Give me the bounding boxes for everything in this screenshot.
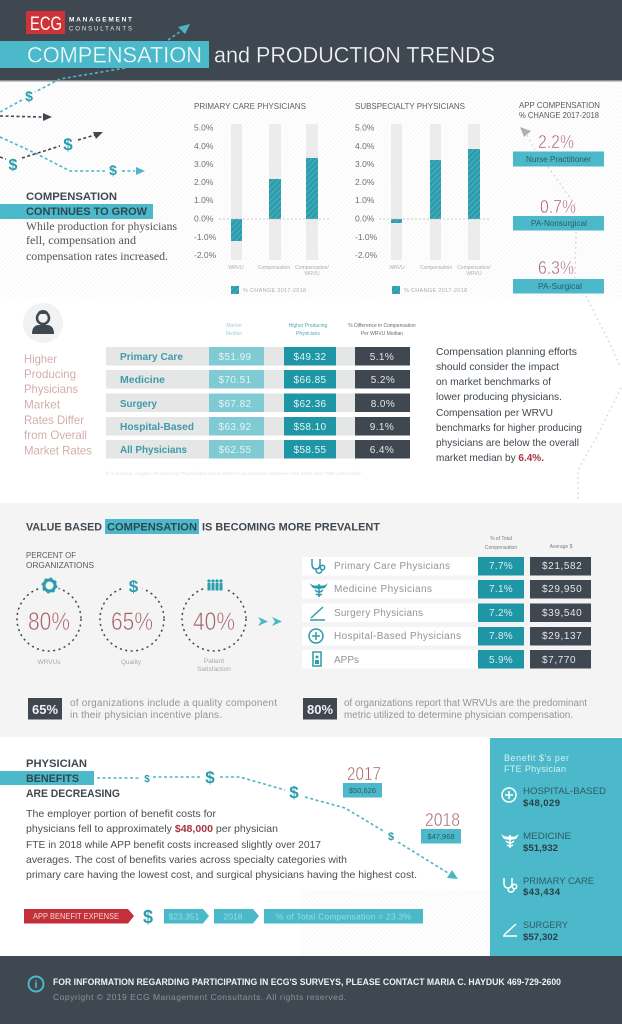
table: value based by specialty: $29,137 (542, 631, 582, 642)
heading: COMPENSATION (107, 522, 197, 534)
logo (26, 11, 132, 35)
chart: primary care physicians: -2.0% (194, 250, 217, 260)
rows: 5.2% (371, 375, 395, 386)
text: higher producing physicians: Higher (24, 352, 57, 366)
stat: patient satisfaction: Satisfaction (197, 666, 231, 673)
text: benefits description (26, 808, 417, 881)
panel: APP compensation: PA-Surgical (538, 282, 582, 291)
chart: subspecialty physicians: 4.0% (355, 141, 375, 151)
table: value based by specialty: 7.2% (489, 608, 513, 619)
text: higher producing physicians: Market (24, 398, 61, 412)
heading: VALUE BASED (26, 522, 102, 534)
heading: physician benefits (0, 758, 120, 800)
text: higher producing physicians: Rates Differ (24, 413, 84, 427)
table: value based by specialty: $21,582 (542, 561, 582, 572)
label: percent of organizations: ORGANIZATIONS (26, 560, 94, 570)
text: compensation planning: lower producing physicians. (436, 391, 562, 403)
chart: subspecialty physicians: 3.0% (355, 159, 375, 169)
item: primary care: PRIMARY CARE (523, 876, 594, 887)
stat: WRVUs: WRVUs (38, 659, 61, 666)
table: value based by specialty: 7.7% (489, 561, 513, 572)
header band (0, 0, 622, 82)
label: 2017 (343, 763, 382, 798)
heading: physician benefits: ARE DECREASING (26, 788, 120, 800)
text: compensation planning: benchmarks for higher producing (436, 422, 582, 434)
rows: Surgery (120, 398, 157, 410)
item: hospital-based (502, 786, 606, 809)
column headers: Market (226, 323, 242, 329)
chart: subspecialty physicians (355, 101, 491, 294)
table: value based by specialty: $7,770 (542, 655, 576, 666)
icon: scalpel (310, 607, 325, 620)
icon: stethoscope (312, 559, 325, 573)
panel: benefit per FTE physician (490, 738, 622, 956)
legend: % CHANGE 2017-2018 (404, 288, 467, 294)
chart: subspecialty physicians: SUBSPECIALTY PHYSICIANS (355, 101, 465, 111)
column headers: Median (226, 331, 242, 337)
chart: subspecialty physicians: 5.0% (355, 122, 375, 132)
APP benefit expense bar: APP BENEFIT EXPENSE (33, 912, 119, 921)
chart: subspecialty physicians: -1.0% (355, 232, 378, 242)
stat: quality: 65% (111, 608, 153, 636)
dotted connector (520, 127, 621, 502)
text: benefits description: The employer portion of benefit costs for (26, 808, 216, 820)
rows: $51.99 (218, 352, 252, 363)
text: compensation planning: Compensation planning efforts (436, 346, 577, 358)
chart: subspecialty physicians: Compensation (420, 265, 452, 271)
item: medicine: MEDICINE (523, 831, 571, 842)
table: value based by specialty (302, 536, 591, 668)
rows (106, 347, 410, 458)
title: and PRODUCTION TRENDS (214, 42, 495, 68)
chart: primary care physicians: Compensation (258, 265, 290, 271)
table: value based by specialty: APPs (334, 655, 359, 666)
icon: info (28, 976, 44, 992)
text: benefits description: FTE in 2018 while APP benefit costs increased slightly over 2017 (26, 839, 321, 851)
column headers: % Difference in Compensation (348, 323, 416, 329)
heading: compensation continues to grow: CONTINUES TO GROW (26, 206, 148, 218)
panel: APP compensation: Nurse Practitioner (526, 155, 591, 164)
callout: 65%: in their physician incentive plans. (70, 710, 222, 721)
text: compensation planning: on market benchmarks of (436, 376, 551, 388)
heading: compensation continues to grow (0, 191, 177, 263)
text: compensation summary: While production for physicians (26, 219, 177, 233)
table: value based by specialty: Surgery Physicians (334, 608, 423, 619)
logo: CONSULTANTS (69, 26, 132, 32)
text: higher producing physicians: Producing (24, 367, 76, 381)
column headers: Per WRVU Median (361, 331, 403, 337)
rows: $70.51 (218, 375, 252, 386)
stat: quality: Quality (121, 659, 142, 666)
text: compensation planning (436, 346, 582, 464)
chart: subspecialty physicians: Compensation/ (457, 265, 491, 271)
icon: caduceus (309, 583, 328, 597)
APP benefit expense bar: % of Total Compensation = 23.3% (276, 912, 411, 922)
panel: APP compensation: PA-Nonsurgical (531, 219, 587, 228)
decorative money arrows: $ (25, 88, 33, 104)
chart: subspecialty physicians: 1.0% (355, 195, 375, 205)
label: 2018: $47,968 (427, 832, 455, 841)
text: compensation planning: should consider the impact (436, 361, 559, 373)
text: benefits description: averages. The cost of benefits varies across specialty categories with (26, 854, 347, 866)
label: 2018: 2018 (425, 809, 460, 830)
text: compensation planning: Compensation per WRVU (436, 407, 553, 419)
text: compensation planning: market median by 6.4%. (436, 452, 544, 464)
panel: APP compensation (513, 100, 604, 294)
chart: primary care physicians: -1.0% (194, 232, 217, 242)
text: compensation planning: physicians are below the overall (436, 437, 579, 449)
text: higher producing physicians: from Overall (24, 428, 87, 442)
callout: 80% (303, 698, 587, 721)
label: percent of organizations (26, 550, 94, 570)
callout: 65% (28, 698, 277, 721)
benefits trend line: $ (205, 768, 215, 787)
text: benefits description: primary care having the lowest cost, and surgical physicians having the highest cost. (26, 869, 417, 881)
rows: Medicine (120, 374, 165, 386)
icon: mobile device (313, 652, 321, 666)
legend (231, 286, 306, 294)
label: 2017: 2017 (347, 763, 381, 784)
chart: primary care physicians: 5.0% (194, 122, 214, 132)
rows: $66.85 (294, 375, 327, 386)
footer: Copyright © 2019 ECG Management Consultants. All rights reserved. (53, 992, 346, 1002)
icon: physician avatar (23, 303, 63, 343)
table: value based by specialty: Hospital-Based Physicians (334, 631, 461, 642)
stat: quality: $ (129, 577, 139, 596)
footnote: If a source, Higher-Producing Physicians have WRVU production between the 60th and 75th percentile (106, 471, 362, 476)
rows: 5.1% (370, 352, 394, 363)
rows: $62.36 (294, 399, 327, 410)
APP benefit expense bar: 2018 (224, 912, 243, 922)
heading: physician benefits: BENEFITS (26, 773, 79, 785)
decorative money arrows: $ (63, 135, 73, 154)
panel: benefit per FTE physician: FTE Physician (504, 764, 566, 774)
panel: APP compensation: % CHANGE 2017-2018 (519, 110, 599, 120)
rows: $67.82 (218, 399, 252, 410)
APP benefit expense bar: $23,351 (169, 912, 200, 922)
stat: patient satisfaction (182, 576, 246, 673)
table: value based by specialty: Primary Care Physicians (334, 561, 450, 572)
chart: primary care physicians: 3.0% (194, 159, 214, 169)
text: compensation summary: compensation rates increased. (26, 249, 168, 263)
legend: % CHANGE 2017-2018 (243, 288, 306, 294)
chart: subspecialty physicians: -2.0% (355, 250, 378, 260)
rows: Hospital-Based (120, 421, 194, 433)
chart: primary care physicians (194, 101, 330, 294)
stat: patient satisfaction: Patient (204, 658, 224, 665)
chart: primary care physicians: 4.0% (194, 141, 214, 151)
benefits trend line: $ (144, 774, 150, 785)
table: value based by specialty: $29,950 (542, 584, 582, 595)
stat: patient satisfaction: 40% (193, 608, 235, 636)
rows: 6.4% (370, 445, 394, 456)
table: value based by specialty: 5.9% (489, 655, 513, 666)
item: hospital-based: $48,029 (523, 798, 560, 809)
chart: primary care physicians: 1.0% (194, 195, 214, 205)
item: surgery: SURGERY (523, 920, 569, 931)
callout: 65%: 65% (32, 702, 58, 717)
heading: physician benefits: PHYSICIAN (26, 758, 87, 770)
panel: APP compensation: 0.7% (540, 196, 576, 217)
chart: subspecialty physicians: 0.0% (355, 214, 375, 224)
decorative money arrows: $ (9, 157, 18, 174)
item: surgery (503, 920, 569, 943)
chart: primary care physicians: PRIMARY CARE PHYSICIANS (194, 101, 306, 111)
heading (26, 519, 380, 534)
legend (392, 286, 467, 294)
panel: value based compensation (0, 503, 622, 737)
callout: 80%: 80% (307, 702, 333, 717)
chart: primary care physicians: 2.0% (194, 177, 214, 187)
chart: subspecialty physicians: WRVU (466, 271, 482, 277)
stat: quality (100, 576, 164, 666)
table: value based by specialty: Compensation (485, 545, 517, 551)
stat: WRVUs (17, 576, 81, 666)
text: higher producing physicians: Market Rates (24, 444, 92, 458)
icon: cross in circle (309, 629, 323, 643)
text: compensation summary (26, 219, 177, 263)
item: medicine: $51,932 (523, 843, 558, 854)
text: benefits description: physicians fell to approximately $48,000 per physician (26, 823, 278, 835)
APP benefit expense bar (24, 907, 423, 927)
rows: Primary Care (120, 351, 183, 363)
benefits trend line: $ (388, 831, 394, 843)
panel: APP compensation: APP COMPENSATION (519, 100, 600, 110)
rows: $62.55 (218, 445, 252, 456)
heading: compensation continues to grow: COMPENSATION (26, 191, 117, 203)
column headers: Higher Producing (289, 323, 328, 329)
decorative money arrows: $ (109, 162, 117, 178)
chart: primary care physicians: WRVU (304, 271, 320, 277)
table: value based by specialty: Average $ (550, 544, 573, 550)
callout: 80%: metric utilized to determine physician compensation. (344, 710, 573, 721)
logo: MANAGEMENT (69, 16, 132, 24)
panel: benefit per FTE physician: Benefit $'s per (504, 753, 569, 763)
table: value based by specialty: % of Total (490, 536, 512, 542)
decorative money arrows (0, 24, 190, 178)
table: value based by specialty: $39,540 (542, 608, 582, 619)
rows: All Physicians (120, 444, 187, 456)
panel: APP compensation: 2.2% (538, 131, 574, 152)
footer: FOR INFORMATION REGARDING PARTICIPATING IN ECG'S SURVEYS, PLEASE CONTACT MARIA C. HAYDUK 469-729-2600 (53, 977, 561, 987)
rows: 9.1% (370, 422, 394, 433)
label: 2018 (421, 809, 461, 844)
arrows (258, 617, 282, 626)
panel: APP compensation: 6.3% (538, 257, 574, 278)
heading: IS BECOMING MORE PREVALENT (202, 522, 380, 534)
title (0, 41, 495, 68)
rows: $49.32 (294, 352, 327, 363)
item: primary care (504, 876, 594, 898)
item: hospital-based: HOSPITAL-BASED (523, 786, 606, 797)
stat: WRVUs: 80% (28, 608, 70, 636)
text: higher producing physicians (24, 352, 92, 458)
title: COMPENSATION (27, 42, 202, 68)
column headers: Physicians (296, 331, 320, 337)
table: market rates (106, 323, 416, 476)
rows: $58.10 (294, 422, 327, 433)
benefits trend line (97, 768, 458, 879)
table: value based by specialty: Medicine Physicians (334, 584, 432, 595)
item: surgery: $57,302 (523, 932, 558, 943)
footer (0, 956, 622, 1024)
table: value based by specialty: 7.1% (489, 584, 513, 595)
item: medicine (501, 831, 571, 854)
chart: subspecialty physicians: 2.0% (355, 177, 375, 187)
chart: primary care physicians: WRVU (228, 265, 244, 271)
chart: primary care physicians: 0.0% (194, 214, 214, 224)
text: higher producing physicians: Physicians (24, 382, 78, 396)
benefits trend line: $ (289, 783, 299, 802)
text: compensation summary: fell, compensation and (26, 233, 136, 247)
column headers (226, 323, 416, 337)
label: 2017: $50,626 (349, 786, 376, 795)
APP benefit expense bar: $ (143, 907, 153, 927)
logo: ECG (30, 14, 62, 35)
icon: info: i (34, 979, 38, 991)
callout: 80%: of organizations report that WRVUs are the predominant (344, 698, 587, 709)
chart: subspecialty physicians: WRVU (389, 265, 405, 271)
rows: $63.92 (218, 422, 252, 433)
rows: 8.0% (371, 399, 395, 410)
rows: $58.55 (294, 445, 327, 456)
label: percent of organizations: PERCENT OF (26, 550, 76, 560)
item: primary care: $43,434 (523, 887, 561, 898)
table: value based by specialty: 7.8% (489, 631, 513, 642)
chart: primary care physicians: Compensation/ (295, 265, 329, 271)
callout: 65%: of organizations include a quality component (70, 698, 277, 709)
